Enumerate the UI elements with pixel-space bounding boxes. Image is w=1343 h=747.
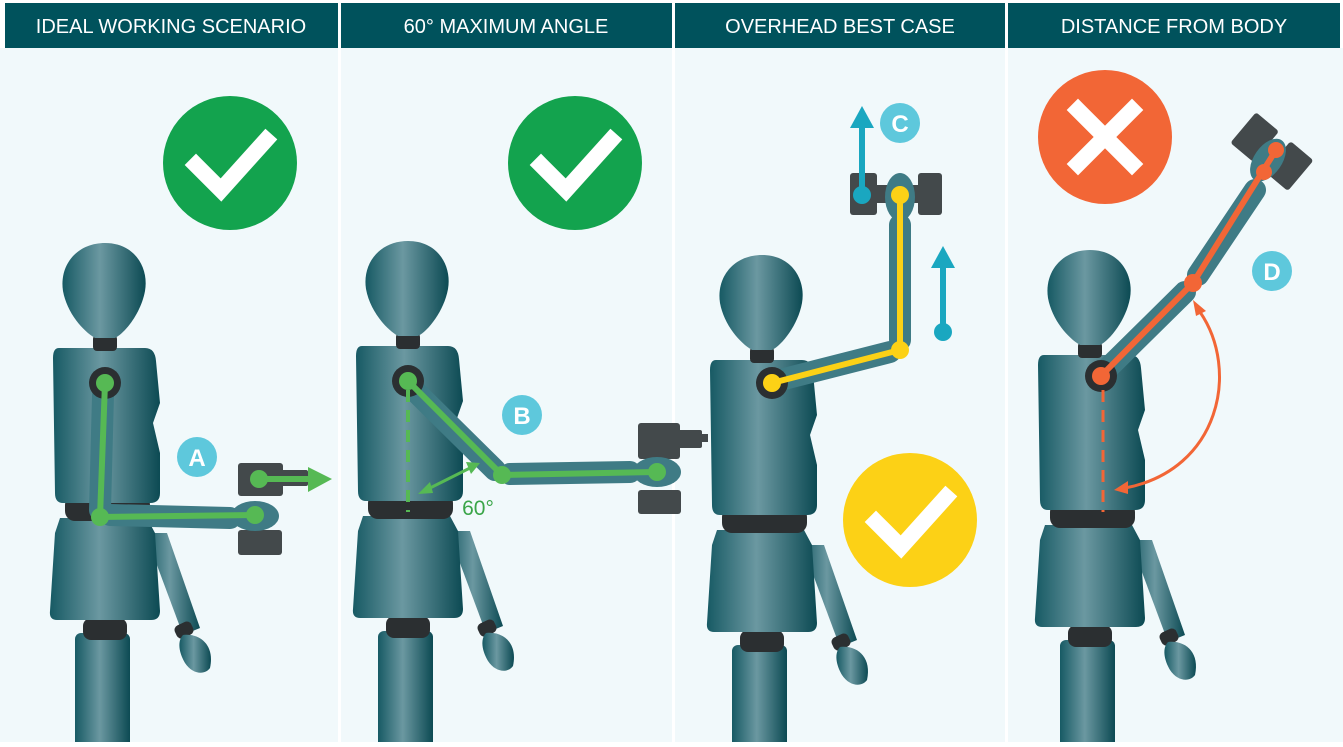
arrow up beside arm [931, 246, 955, 341]
angle arrow [418, 462, 480, 494]
panel: overhead best case [707, 103, 977, 747]
badge B [502, 395, 542, 435]
badge D [1252, 251, 1292, 291]
arm 1 [89, 367, 279, 531]
panel: ideal working scenario [50, 96, 332, 747]
icon: orange cross [1038, 70, 1172, 204]
header: 60 max angle: 60° MAXIMUM ANGLE [404, 16, 608, 38]
figure 3 [707, 255, 868, 747]
curved angle arrow [1114, 300, 1219, 494]
arm 3 [756, 173, 915, 399]
panel: distance from body [1035, 70, 1313, 747]
arrow up at drill [850, 106, 874, 204]
dashed vertical reference [406, 390, 410, 512]
header: overhead best case [675, 3, 1005, 48]
drill 4 [1230, 112, 1313, 191]
badge B: B [513, 403, 531, 430]
dashed vertical reference [1102, 390, 1104, 512]
badge A [177, 437, 217, 477]
label 60: 60° [462, 497, 494, 520]
header: ideal working scenario: IDEAL WORKING SCENARIO [36, 16, 306, 38]
drill 1 [238, 463, 308, 555]
header: distance from body [1008, 3, 1340, 48]
arm 4 [1085, 132, 1293, 392]
header: ideal working scenario [5, 3, 338, 48]
header: distance from body: DISTANCE FROM BODY [1061, 16, 1287, 38]
drill 2 [638, 423, 708, 514]
header: overhead best case: OVERHEAD BEST CASE [725, 16, 955, 38]
figure 4 [1035, 250, 1196, 747]
arrow: forward [250, 467, 332, 492]
badge A: A [188, 445, 206, 472]
icon: yellow check [843, 453, 977, 587]
header: 60 max angle [341, 3, 672, 48]
badge C [880, 103, 920, 143]
figure 1 [50, 243, 211, 747]
figure 2 [353, 241, 514, 747]
badge C: C [891, 111, 909, 138]
icon: green check [163, 96, 297, 230]
icon: green check [508, 96, 642, 230]
arm 2 [392, 365, 681, 487]
badge D: D [1263, 259, 1281, 286]
panel: 60 degree maximum angle [353, 96, 708, 747]
drill 3 [850, 173, 942, 215]
